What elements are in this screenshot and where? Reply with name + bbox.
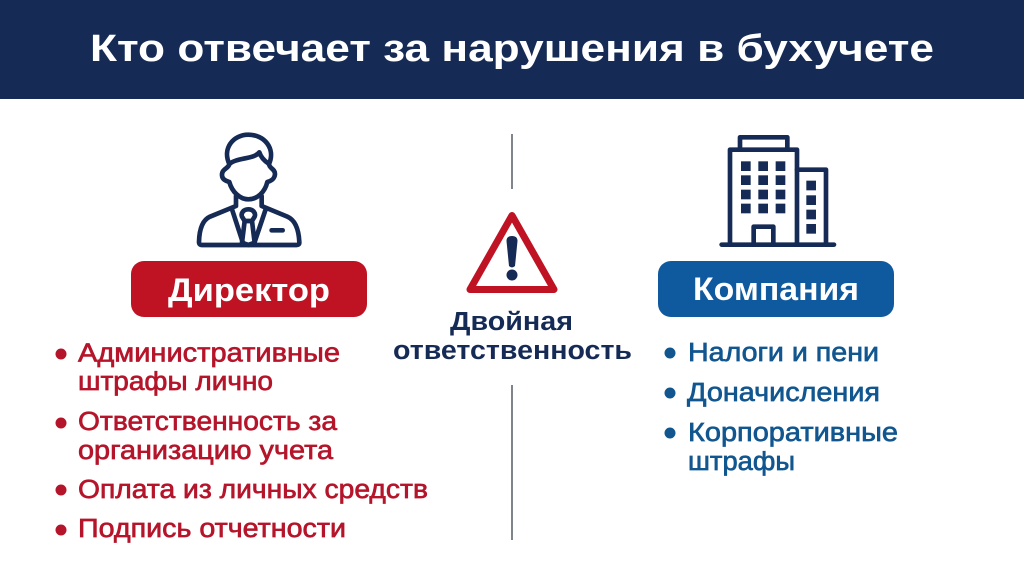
director list: штрафы лично [78,368,273,396]
director list: Административные [78,340,340,368]
icon: warning triangle [470,216,554,290]
label: Двойная [450,308,573,336]
company list: Корпоративные [688,419,898,447]
director list: организацию учета [78,437,334,465]
company list: Доначисления [687,379,880,407]
icon: office building [722,137,834,245]
director list: Оплата из личных средств [78,476,428,504]
panel: double responsibility [393,216,632,365]
director list: Ответственность за [78,408,338,436]
company list: штрафы [688,448,795,476]
panel: director [56,135,428,543]
company badge [658,261,894,317]
director badge [131,261,367,317]
panel: company [658,137,898,476]
director badge: Директор [168,272,330,308]
company list [665,339,898,476]
icon: director in suit [199,135,299,245]
company list: Налоги и пени [688,339,879,367]
director list: Подпись отчетности [78,515,346,543]
label: ответственность [393,337,632,365]
title: Кто отвечает за нарушения в бухучете [90,28,934,70]
company badge: Компания [693,271,859,307]
label [393,308,632,365]
director list [56,340,428,543]
header banner [0,0,1024,99]
